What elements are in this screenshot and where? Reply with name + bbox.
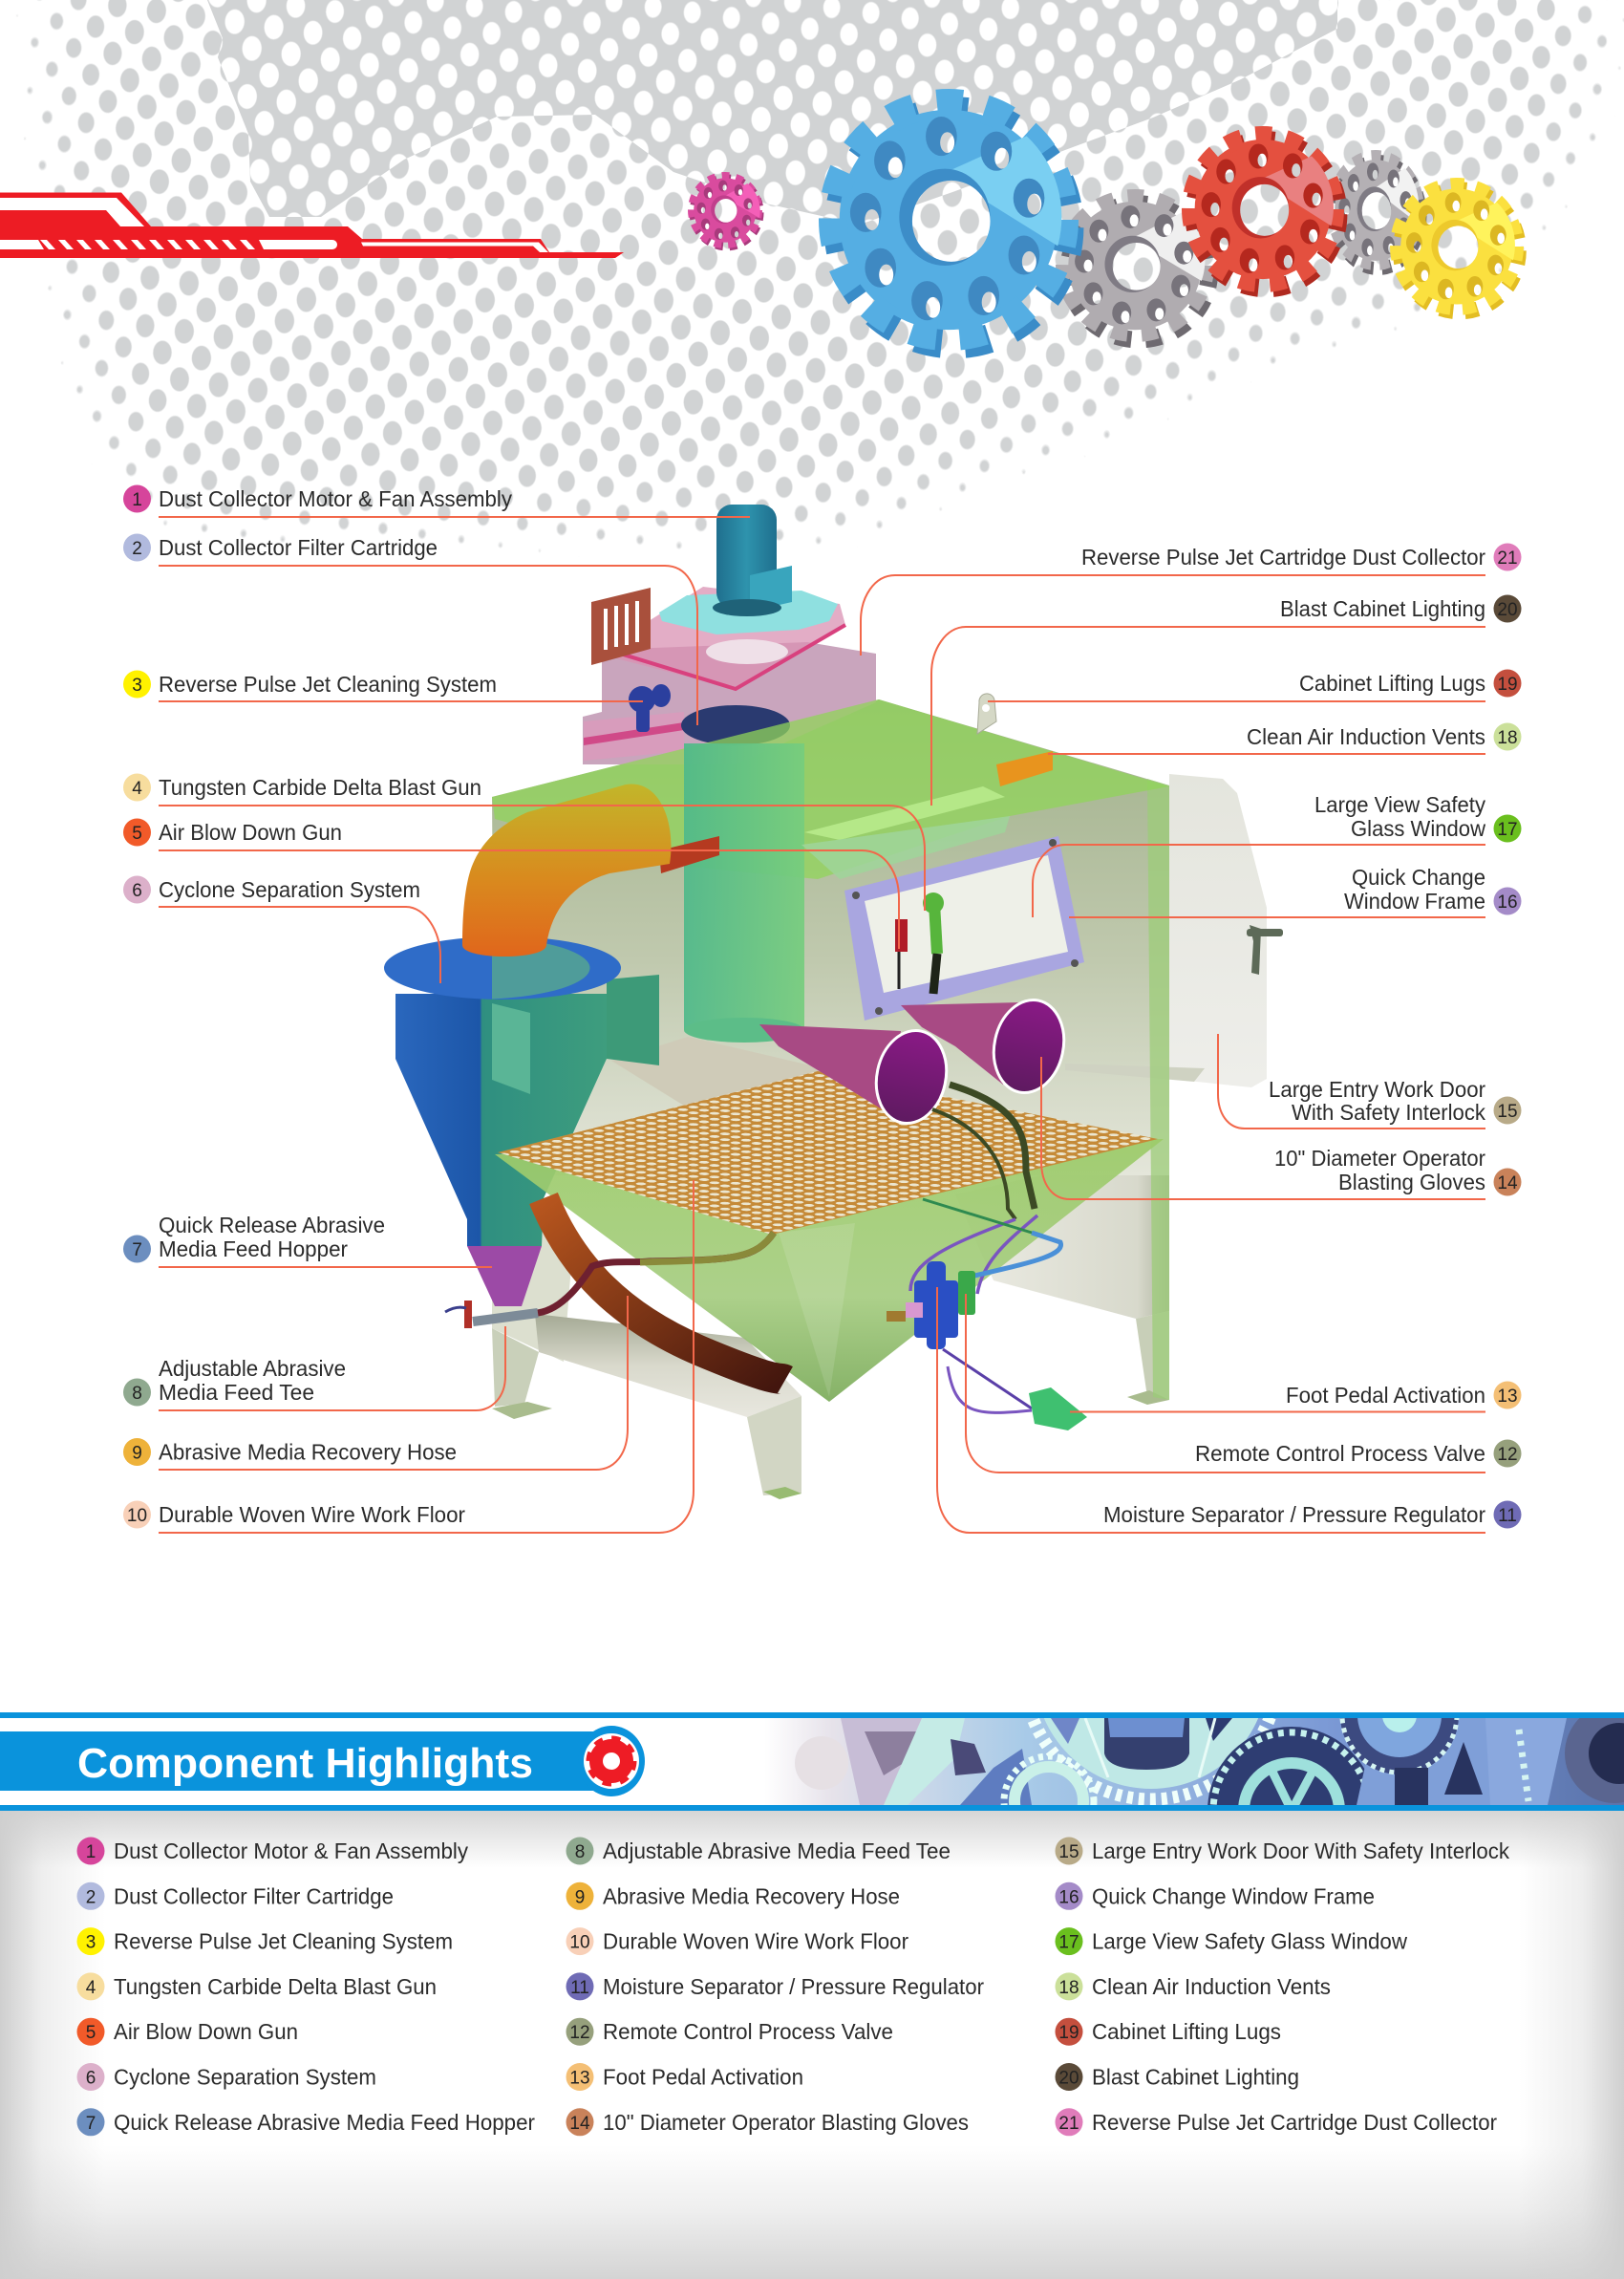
legend item 6: Cyclone Separation System [114, 2064, 376, 2089]
legend item 17: 17 [1058, 1933, 1079, 1953]
dark gear with spokes [1207, 1727, 1364, 1805]
callout 15: With Safety Interlock [1292, 1100, 1485, 1125]
back wall beige floor [611, 1037, 831, 1123]
far right dark gear [1565, 1718, 1624, 1803]
callout 1: 1 [132, 490, 142, 510]
callout 8: 8 [132, 1384, 142, 1404]
media feed valve and hopper tee [445, 1233, 774, 1328]
callout 16 [1069, 865, 1521, 917]
legend item 10: Durable Woven Wire Work Floor [603, 1929, 908, 1954]
legend item 1: Dust Collector Motor & Fan Assembly [114, 1838, 468, 1863]
gear: red [1190, 136, 1338, 289]
callout 5 [123, 818, 899, 949]
legend item 5: Air Blow Down Gun [114, 2019, 298, 2044]
legend item 7: 7 [86, 2114, 96, 2134]
callout 10: 10 [127, 1506, 147, 1526]
callout 17: Glass Window [1351, 816, 1485, 841]
callout 8 [123, 1326, 505, 1410]
callout 5: Air Blow Down Gun [159, 820, 342, 845]
legend item 15: Large Entry Work Door With Safety Interlock [1092, 1838, 1509, 1863]
legend item 3: Reverse Pulse Jet Cleaning System [114, 1929, 453, 1954]
cabinet interior wall [492, 699, 1169, 1175]
operator gloves [759, 994, 1072, 1129]
callout 1: Dust Collector Motor & Fan Assembly [159, 486, 512, 511]
rear skirts and legs [492, 1147, 1169, 1499]
callout 17: Large View Safety [1314, 792, 1485, 817]
callout 12: Remote Control Process Valve [1195, 1441, 1485, 1466]
green blast gun [923, 892, 944, 994]
panel: component highlights background [0, 1811, 1624, 2279]
legend item 5: 5 [86, 2023, 96, 2043]
work door [1169, 774, 1267, 1087]
legend item 9: Abrasive Media Recovery Hose [603, 1883, 900, 1908]
large pale toothed ring [1044, 1718, 1258, 1789]
legend item 4: 4 [86, 1978, 96, 1998]
callout 21 [861, 543, 1521, 656]
callout 15 [1218, 1034, 1521, 1129]
legend column 1 [76, 1837, 535, 2136]
woven wire floor [498, 1071, 1158, 1235]
callout 7: Quick Release Abrasive [159, 1213, 385, 1237]
callout 2 [123, 533, 697, 725]
collection hopper [495, 1139, 1164, 1402]
gear: large blue [833, 103, 1069, 344]
callout 6: 6 [132, 881, 142, 901]
central cartridge column [684, 743, 804, 1043]
callout 11 [937, 1287, 1521, 1533]
callout 21: Reverse Pulse Jet Cartridge Dust Collector [1081, 545, 1485, 570]
vent grille [591, 588, 651, 665]
pale lavender gear at fade [795, 1736, 826, 1790]
cabinet top plate [492, 699, 1169, 879]
callout 2: Dust Collector Filter Cartridge [159, 535, 438, 560]
callout 15: 15 [1497, 1102, 1518, 1122]
cyan motor plate [659, 591, 838, 634]
callout 11: 11 [1498, 1506, 1517, 1526]
air and control hoses [910, 1085, 1061, 1412]
callout 5: 5 [132, 824, 142, 844]
legend item 3: 3 [86, 1933, 96, 1953]
callout 6: Cyclone Separation System [159, 877, 420, 902]
callout 8: Media Feed Tee [159, 1380, 314, 1405]
callout 15: Large Entry Work Door [1269, 1077, 1485, 1102]
legend item 9: 9 [575, 1887, 585, 1907]
callout 14: 10" Diameter Operator [1274, 1146, 1485, 1171]
cyclone separator [384, 784, 671, 1306]
callout 10 [123, 1180, 694, 1533]
legend item 1: 1 [86, 1842, 96, 1862]
callout 7 [123, 1213, 492, 1267]
callout 4: Tungsten Carbide Delta Blast Gun [159, 775, 481, 800]
decorative gears [692, 103, 1519, 344]
legend item 21: Reverse Pulse Jet Cartridge Dust Collector [1092, 2110, 1497, 2135]
dust collector [583, 505, 876, 764]
callout 4: 4 [132, 779, 142, 799]
legend item 19: Cabinet Lifting Lugs [1092, 2019, 1281, 2044]
halftone dot background [16, 0, 1624, 552]
gear: pink [692, 176, 760, 247]
legend item 13: Foot Pedal Activation [603, 2064, 803, 2089]
legend column 3 [1055, 1837, 1509, 2136]
callout 14 [1041, 1057, 1521, 1199]
lifting lug [977, 694, 996, 734]
callout 7: 7 [132, 1240, 142, 1260]
callout 9 [123, 1296, 628, 1470]
callout 20: Blast Cabinet Lighting [1280, 596, 1485, 621]
callout 6 [123, 875, 440, 983]
legend item 8: Adjustable Abrasive Media Feed Tee [603, 1838, 951, 1863]
callout 20: 20 [1497, 600, 1518, 620]
light fixture [801, 786, 1010, 879]
legend item 12: 12 [569, 2023, 590, 2043]
legend item 13: 13 [569, 2068, 590, 2089]
callout 4 [123, 774, 925, 911]
callout 8: Adjustable Abrasive [159, 1356, 346, 1381]
legend item 21: 21 [1058, 2114, 1079, 2134]
callout 2: 2 [132, 539, 142, 559]
callout 3 [123, 671, 643, 701]
legend item 4: Tungsten Carbide Delta Blast Gun [114, 1974, 437, 1999]
motor [713, 505, 792, 616]
legend item 20: Blast Cabinet Lighting [1092, 2064, 1299, 2089]
legend item 16: 16 [1058, 1887, 1079, 1907]
legend item 7: Quick Release Abrasive Media Feed Hopper [114, 2110, 535, 2135]
callout 16: 16 [1497, 892, 1518, 913]
callout 10: Durable Woven Wire Work Floor [159, 1502, 465, 1527]
legend item 2: 2 [86, 1887, 96, 1907]
callout 12: 12 [1497, 1445, 1518, 1465]
callout 3: Reverse Pulse Jet Cleaning System [159, 672, 497, 697]
callout 9: 9 [132, 1443, 142, 1464]
door tray [1065, 1064, 1205, 1082]
legend item 18: Clean Air Induction Vents [1092, 1974, 1331, 1999]
callout 19 [988, 669, 1521, 701]
callout 13 [1070, 1382, 1521, 1412]
gear: grey left [1064, 198, 1209, 340]
legend item 11: Moisture Separator / Pressure Regulator [603, 1974, 984, 1999]
callout 12 [966, 1294, 1521, 1473]
callout 17: 17 [1497, 820, 1518, 840]
moisture separator regulator [887, 1261, 975, 1349]
blast cabinet machine illustration [384, 505, 1283, 1499]
legend item 6: 6 [86, 2068, 96, 2089]
callout 17 [1033, 792, 1521, 917]
upper right gear [1357, 1718, 1490, 1805]
right green wall band [1147, 779, 1169, 1400]
callout 9: Abrasive Media Recovery Hose [159, 1439, 457, 1464]
callout 19: 19 [1497, 675, 1518, 695]
callout 20 [931, 594, 1521, 806]
callout 16: Window Frame [1344, 889, 1485, 914]
window frame [844, 836, 1084, 1021]
orange induction vents [659, 751, 1053, 873]
banner: gears photograph [783, 1718, 1624, 1805]
filter cartridge disc [681, 705, 790, 745]
callout 11: Moisture Separator / Pressure Regulator [1103, 1502, 1485, 1527]
legend item 14: 10" Diameter Operator Blasting Gloves [603, 2110, 969, 2135]
legend item 17: Large View Safety Glass Window [1092, 1929, 1407, 1954]
legend item 20: 20 [1058, 2068, 1079, 2089]
air blow gun [895, 919, 908, 989]
recovery hose [544, 1198, 785, 1380]
callout 14: Blasting Gloves [1338, 1170, 1485, 1194]
legend item 8: 8 [575, 1842, 585, 1862]
legend item 14: 14 [569, 2114, 590, 2134]
callout 13: 13 [1497, 1387, 1518, 1407]
callout 16: Quick Change [1352, 865, 1485, 890]
callout 18 [1048, 722, 1521, 754]
legend item 18: 18 [1058, 1978, 1079, 1998]
callout 1 [123, 485, 750, 517]
legend column 2 [566, 1837, 984, 2136]
callout 18: Clean Air Induction Vents [1247, 724, 1485, 749]
callout 21: 21 [1497, 548, 1518, 569]
legend item 2: Dust Collector Filter Cartridge [114, 1883, 394, 1908]
legend item 12: Remote Control Process Valve [603, 2019, 893, 2044]
legend item 11: 11 [570, 1978, 589, 1998]
heading bar: Component Highlights [0, 1726, 645, 1796]
foot pedal [1029, 1387, 1087, 1430]
gear: yellow [1398, 185, 1519, 312]
elbow duct [462, 784, 671, 957]
small pale gear lower left [1009, 1761, 1089, 1805]
legend item 10: 10 [569, 1933, 590, 1953]
legend item 15: 15 [1058, 1842, 1079, 1862]
callout 19: Cabinet Lifting Lugs [1299, 671, 1485, 696]
legend item 19: 19 [1058, 2023, 1079, 2043]
icon: red gear badge [578, 1726, 645, 1796]
pulse jet valve [629, 684, 671, 732]
blue banner rules [0, 1712, 1624, 1811]
callout 3: 3 [132, 676, 142, 696]
legend item 16: Quick Change Window Frame [1092, 1883, 1375, 1908]
gear: grey right [1333, 157, 1421, 269]
callout 14: 14 [1497, 1173, 1518, 1193]
callout 13: Foot Pedal Activation [1286, 1383, 1485, 1408]
red speed stripes [0, 193, 624, 258]
heading bar: Component Highlights: Component Highlights [77, 1740, 533, 1787]
door handle [1247, 925, 1283, 975]
callout 18: 18 [1497, 728, 1518, 748]
callout 7: Media Feed Hopper [159, 1236, 348, 1261]
